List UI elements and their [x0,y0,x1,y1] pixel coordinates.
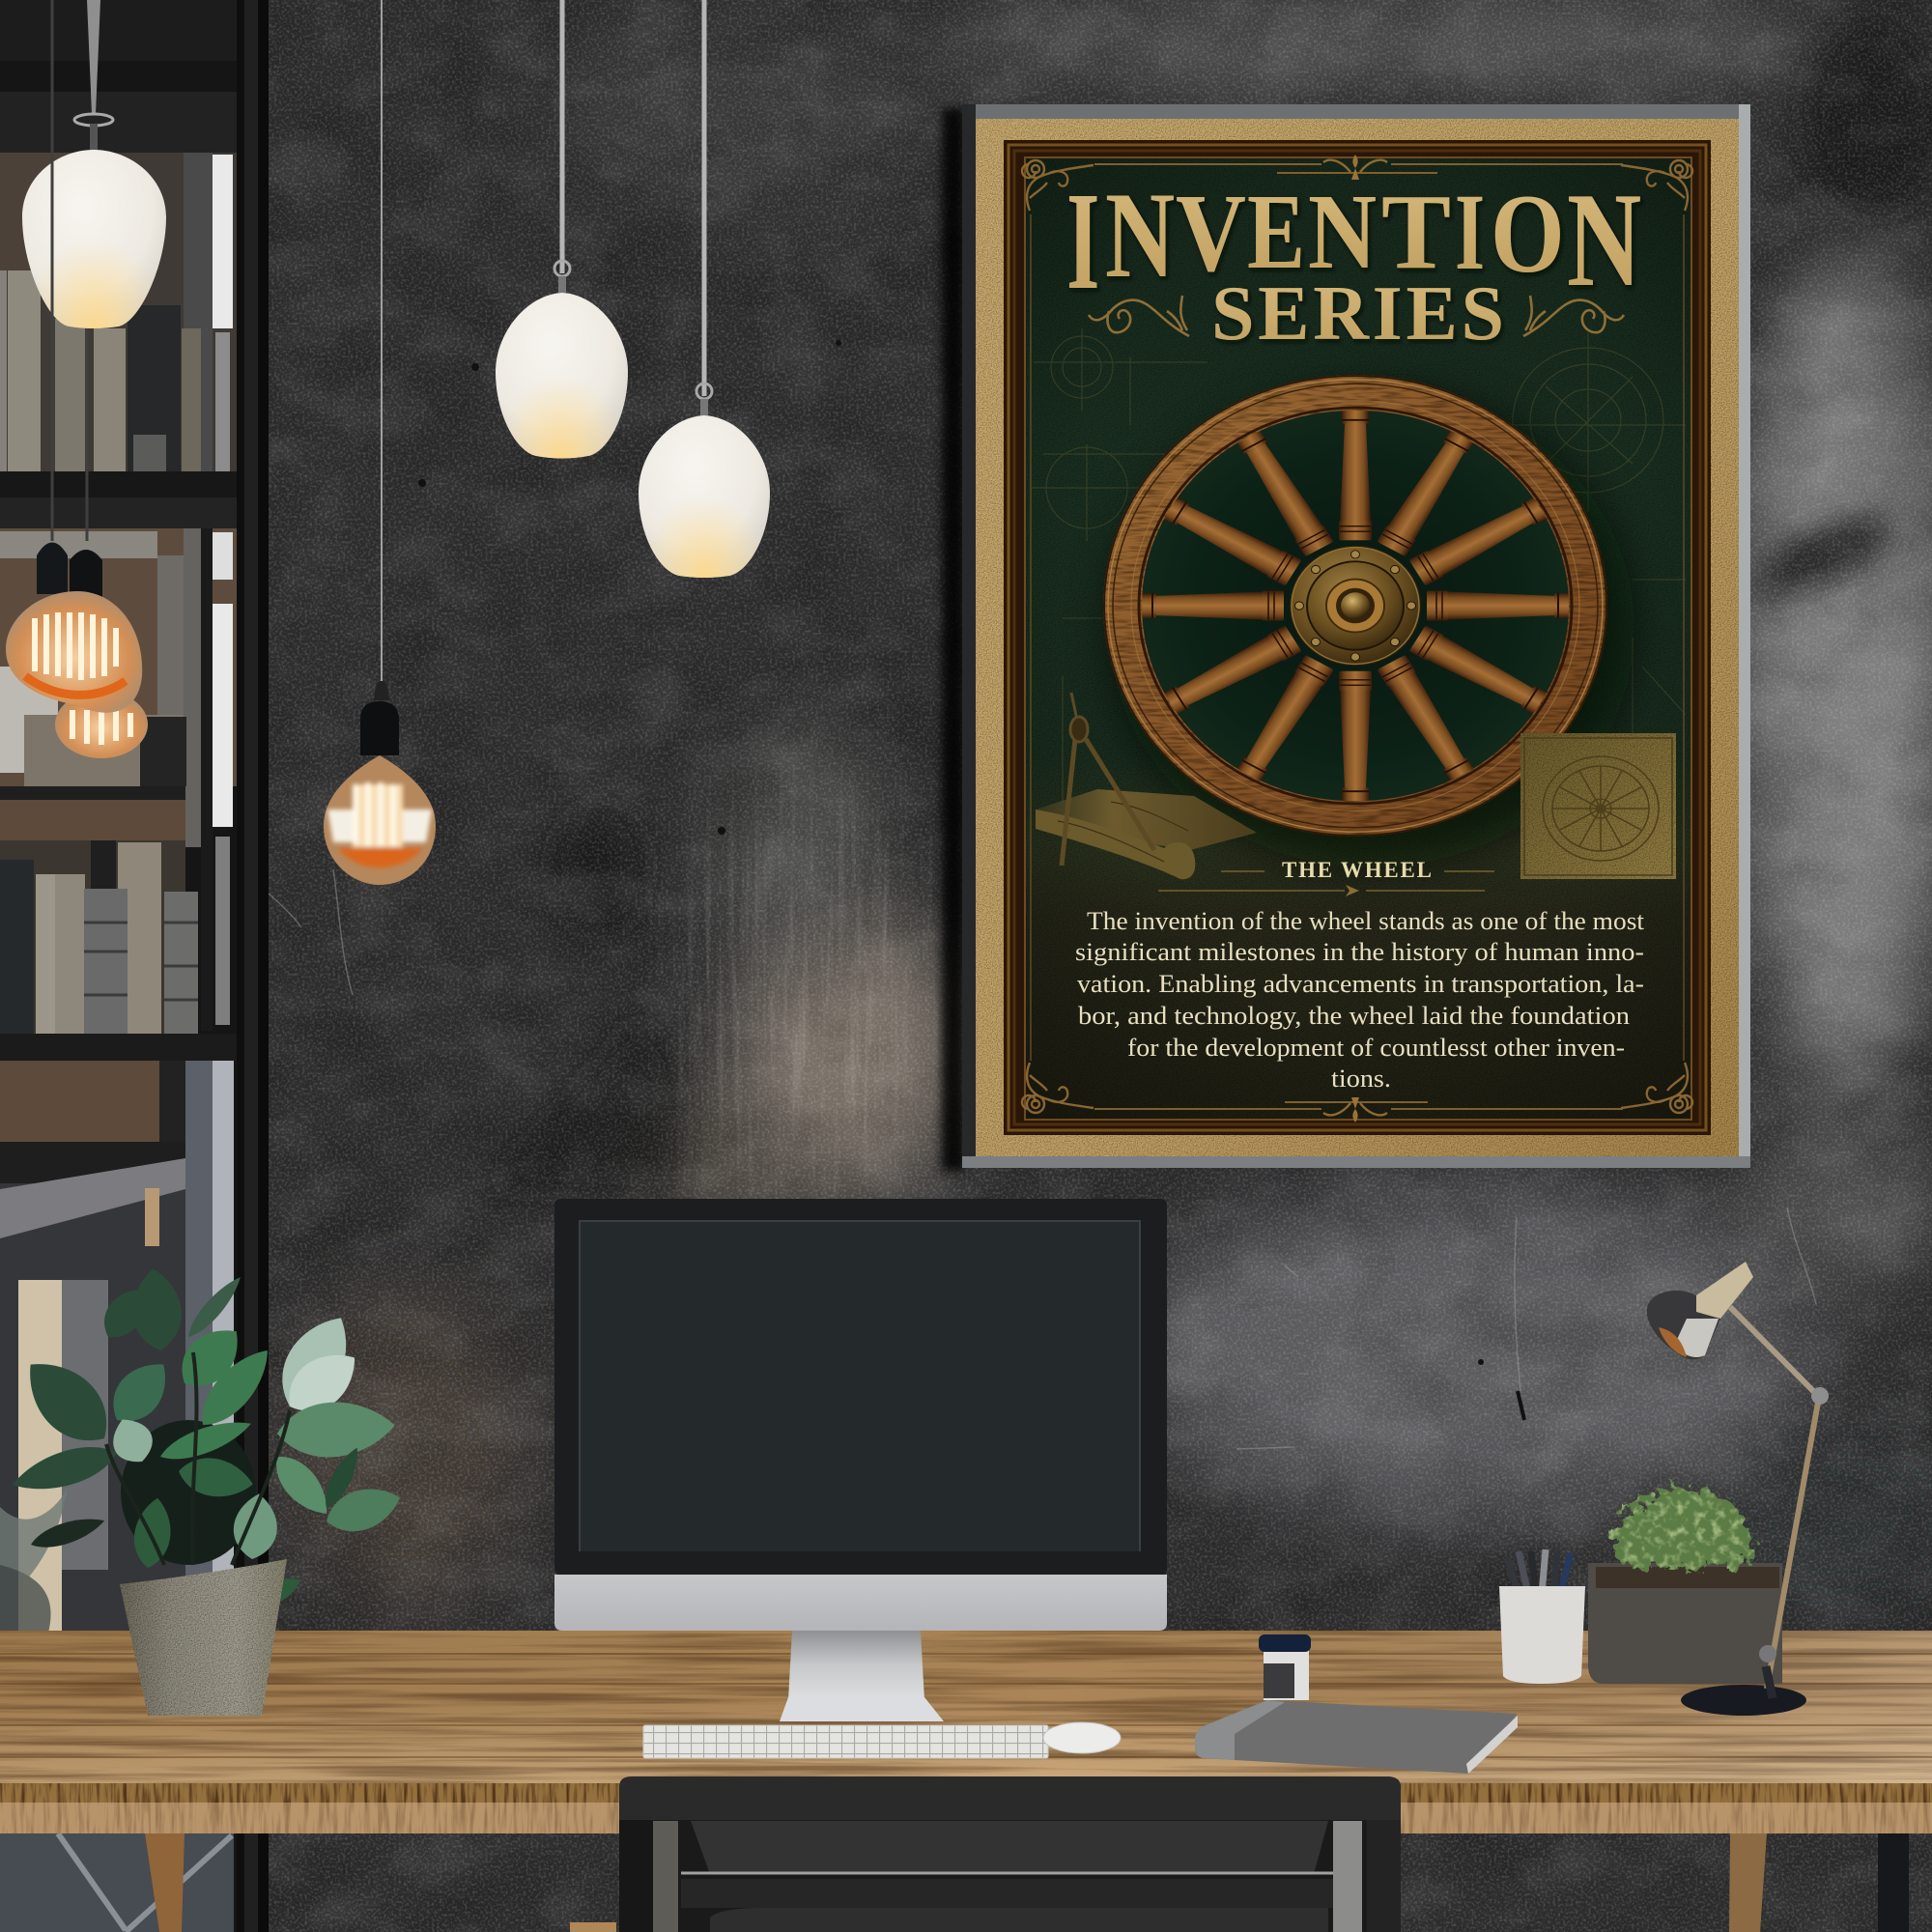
rolled map [1036,789,1257,879]
pendant lamp: white shade right [639,0,770,578]
title: E [1247,172,1305,291]
description text [1075,907,1645,1093]
chair [619,1776,1401,1932]
keyboard [643,1725,1048,1758]
description text: for the development of countlesst other inven- [1127,1034,1625,1062]
bookshelf [0,0,269,1932]
wheel rim [1104,376,1606,836]
wheel [1104,376,1634,867]
small herb plant [1612,1489,1754,1570]
title: I [1455,173,1485,293]
pendant lamp: shelf white shade [22,0,166,328]
title: N [1567,164,1641,314]
compass [1062,693,1154,866]
chair sling [681,1821,1338,1932]
flourish left [1089,296,1189,336]
section label: the wheel: THE WHEEL [1282,858,1432,882]
title: O [1491,172,1565,297]
desk lamp [1647,1262,1829,1716]
potted plant [8,1266,406,1716]
subtitle: SERIES [1211,271,1504,356]
pendant filament bulb [324,0,436,885]
poster mat [976,119,1739,1156]
planter box [1588,1563,1782,1684]
poster [976,119,1739,1156]
top and side ornaments [1022,155,1692,1122]
poster border [1004,140,1711,1135]
pot [120,1559,287,1716]
title: T [1381,171,1451,291]
description text: significant milestones in the history of human inno- [1075,938,1644,966]
flourish right [1523,296,1624,336]
description text: tions. [1331,1065,1391,1093]
chair top rail [619,1776,1401,1820]
small bottle [1259,1634,1311,1700]
spokes [1139,408,1572,804]
faint blueprint sketches [1032,328,1686,802]
desk front edge [0,1783,1932,1833]
monitor screen [580,1221,1140,1551]
title: N [1105,167,1175,303]
monitor stand [780,1631,944,1721]
desk legs [145,1833,1909,1932]
title: I [1066,163,1099,318]
blueprint square [1520,733,1676,879]
pendant lamp: white shade left [496,0,628,458]
leaves [8,1266,406,1614]
monitor [554,1199,1167,1721]
foliage mass [121,1420,256,1565]
monitor chin [554,1575,1167,1631]
description text: vation. Enabling advancements in transportation, la- [1077,970,1644,998]
pencil cup [1499,1549,1585,1684]
title: N [1308,171,1377,291]
title [1066,163,1641,318]
poster green panel [1025,157,1691,1120]
mouse [1043,1722,1121,1753]
wheel shadow [1109,388,1634,867]
desk top [0,1631,1932,1783]
poster frame [942,104,1750,1171]
plant behind desk: background foliage [0,1488,68,1633]
hub [1290,546,1421,666]
books: lower shelf [0,840,198,1034]
description text: The invention of the wheel stands as one of the most [1087,907,1645,935]
books: upper shelf [0,270,201,471]
title: V [1176,171,1246,296]
notebook [1195,1700,1518,1774]
section label: the wheel [1158,858,1494,896]
description text: bor, and technology, the wheel laid the foundation [1078,1002,1630,1030]
wheel opening [1137,406,1574,806]
filament bulbs in shelf [6,0,148,758]
chair posts [619,1820,1401,1932]
